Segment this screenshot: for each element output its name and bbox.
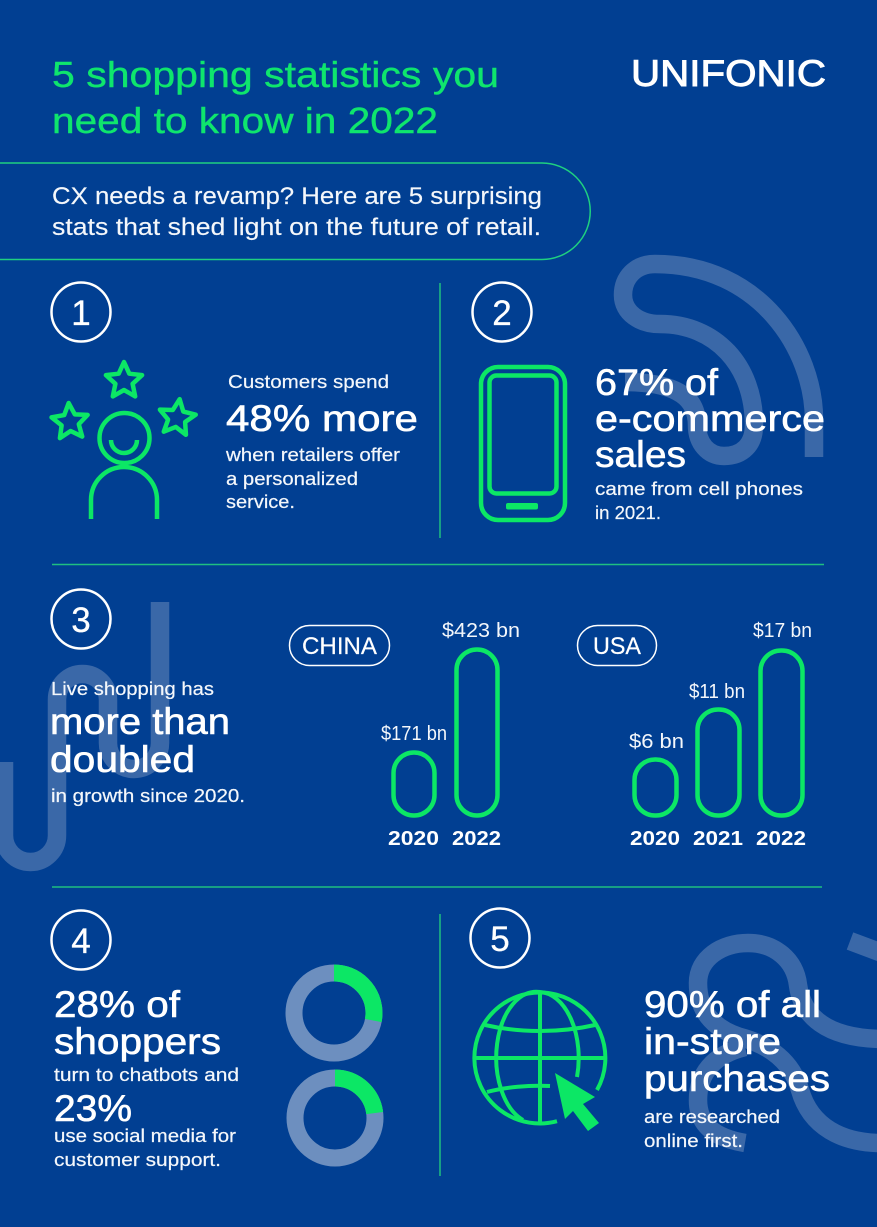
number badge 4: 4 <box>71 922 91 961</box>
background swirl: left <box>4 602 160 862</box>
number badge 2 <box>472 282 532 342</box>
title: 5 shopping statistics you <box>52 54 499 95</box>
text: 28% of shoppers, 23%: shoppers <box>54 1021 221 1062</box>
donut chart: 28% <box>294 973 374 1053</box>
text: more than doubled: Live shopping has <box>51 678 214 699</box>
bar chart: China: 2022 <box>452 828 501 850</box>
number badge 1 <box>52 282 110 342</box>
intro panel <box>0 163 590 260</box>
panel: stat 4 customer support <box>52 910 375 1170</box>
panel: stat 2 cell phones <box>472 282 825 523</box>
icon: globe with cursor <box>474 992 605 1131</box>
pill label: USA: USA <box>593 633 641 660</box>
bar chart: USA: 2020 <box>630 828 680 850</box>
text: 28% of shoppers, 23%: use social media for <box>54 1125 236 1146</box>
pill label: China: CHINA <box>302 633 377 660</box>
background swirl: top right <box>623 264 814 457</box>
bar chart: China: $423 bn <box>442 620 520 642</box>
text: 48% more: a personalized <box>226 468 358 489</box>
text: 28% of shoppers, 23% <box>54 984 239 1170</box>
text: 67% of e-commerce sales: in 2021. <box>595 502 661 523</box>
number badge 2: 2 <box>492 294 512 333</box>
text: more than doubled: more than <box>50 701 230 742</box>
bar chart: China: $171 bn <box>381 723 447 745</box>
pill label: China <box>290 626 390 666</box>
text: more than doubled: doubled <box>50 739 195 780</box>
text: 48% more <box>225 371 418 512</box>
panel: stat 3 live shopping <box>50 590 812 850</box>
pill label: USA <box>578 626 656 666</box>
text: 28% of shoppers, 23%: 23% <box>54 1088 132 1129</box>
number badge 3 <box>52 590 110 648</box>
bar chart: USA: 2021 <box>693 828 743 850</box>
text: 67% of e-commerce sales <box>595 362 825 523</box>
title <box>52 54 499 141</box>
panel: stat 5 researched online <box>470 908 830 1151</box>
donut chart: 23% <box>295 1078 375 1158</box>
text: 90% of all in-store purchases: purchases <box>644 1058 830 1099</box>
text: 28% of shoppers, 23%: turn to chatbots and <box>54 1064 239 1085</box>
number badge 5 <box>470 908 530 968</box>
divider <box>439 914 441 1176</box>
number badge 3: 3 <box>71 601 91 640</box>
text: 48% more: 48% more <box>226 398 418 439</box>
bar chart: USA <box>578 620 812 850</box>
background swirl: bottom right <box>698 941 877 1143</box>
divider <box>439 283 441 538</box>
number badge 4 <box>52 910 110 970</box>
text: more than doubled: in growth since 2020. <box>51 785 245 806</box>
bar chart: China <box>290 620 520 850</box>
number badge 5: 5 <box>490 920 510 959</box>
divider <box>52 564 824 566</box>
intro panel: CX needs a revamp? Here are 5 surprising <box>52 183 542 210</box>
icon: smiling person with three stars <box>51 362 198 519</box>
text: 48% more: when retailers offer <box>225 444 400 465</box>
text: 90% of all in-store purchases: online first. <box>644 1130 743 1151</box>
divider <box>52 886 822 888</box>
text: 67% of e-commerce sales: 67% of <box>595 362 719 403</box>
text: 28% of shoppers, 23%: customer support. <box>54 1149 221 1170</box>
icon: smartphone <box>481 367 565 520</box>
intro panel: stats that shed light on the future of retail. <box>52 214 541 241</box>
text: 67% of e-commerce sales: came from cell phones <box>595 478 803 499</box>
number badge 1: 1 <box>71 294 91 333</box>
text: 48% more: Customers spend <box>228 371 389 392</box>
text: 48% more: service. <box>226 491 295 512</box>
text: 67% of e-commerce sales: sales <box>595 434 686 475</box>
title: need to know in 2022 <box>52 100 438 141</box>
logo: Unifonic: UNIFONIC <box>631 53 826 94</box>
text: more than doubled <box>50 678 245 806</box>
panel: stat 1 personalized service <box>51 282 418 519</box>
bar chart: USA: $6 bn <box>629 731 684 753</box>
text: 90% of all in-store purchases: are researched <box>644 1106 780 1127</box>
text: 90% of all in-store purchases <box>644 984 830 1151</box>
bar chart: USA: 2022 <box>756 828 806 850</box>
text: 90% of all in-store purchases: 90% of all <box>644 984 821 1025</box>
text: 90% of all in-store purchases: in-store <box>644 1021 781 1062</box>
bar chart: USA: $11 bn <box>689 681 745 703</box>
bar chart: China: 2020 <box>388 828 439 850</box>
text: 67% of e-commerce sales: e-commerce <box>595 398 825 439</box>
bar chart: USA: $17 bn <box>753 620 812 642</box>
text: 28% of shoppers, 23%: 28% of <box>54 984 181 1025</box>
